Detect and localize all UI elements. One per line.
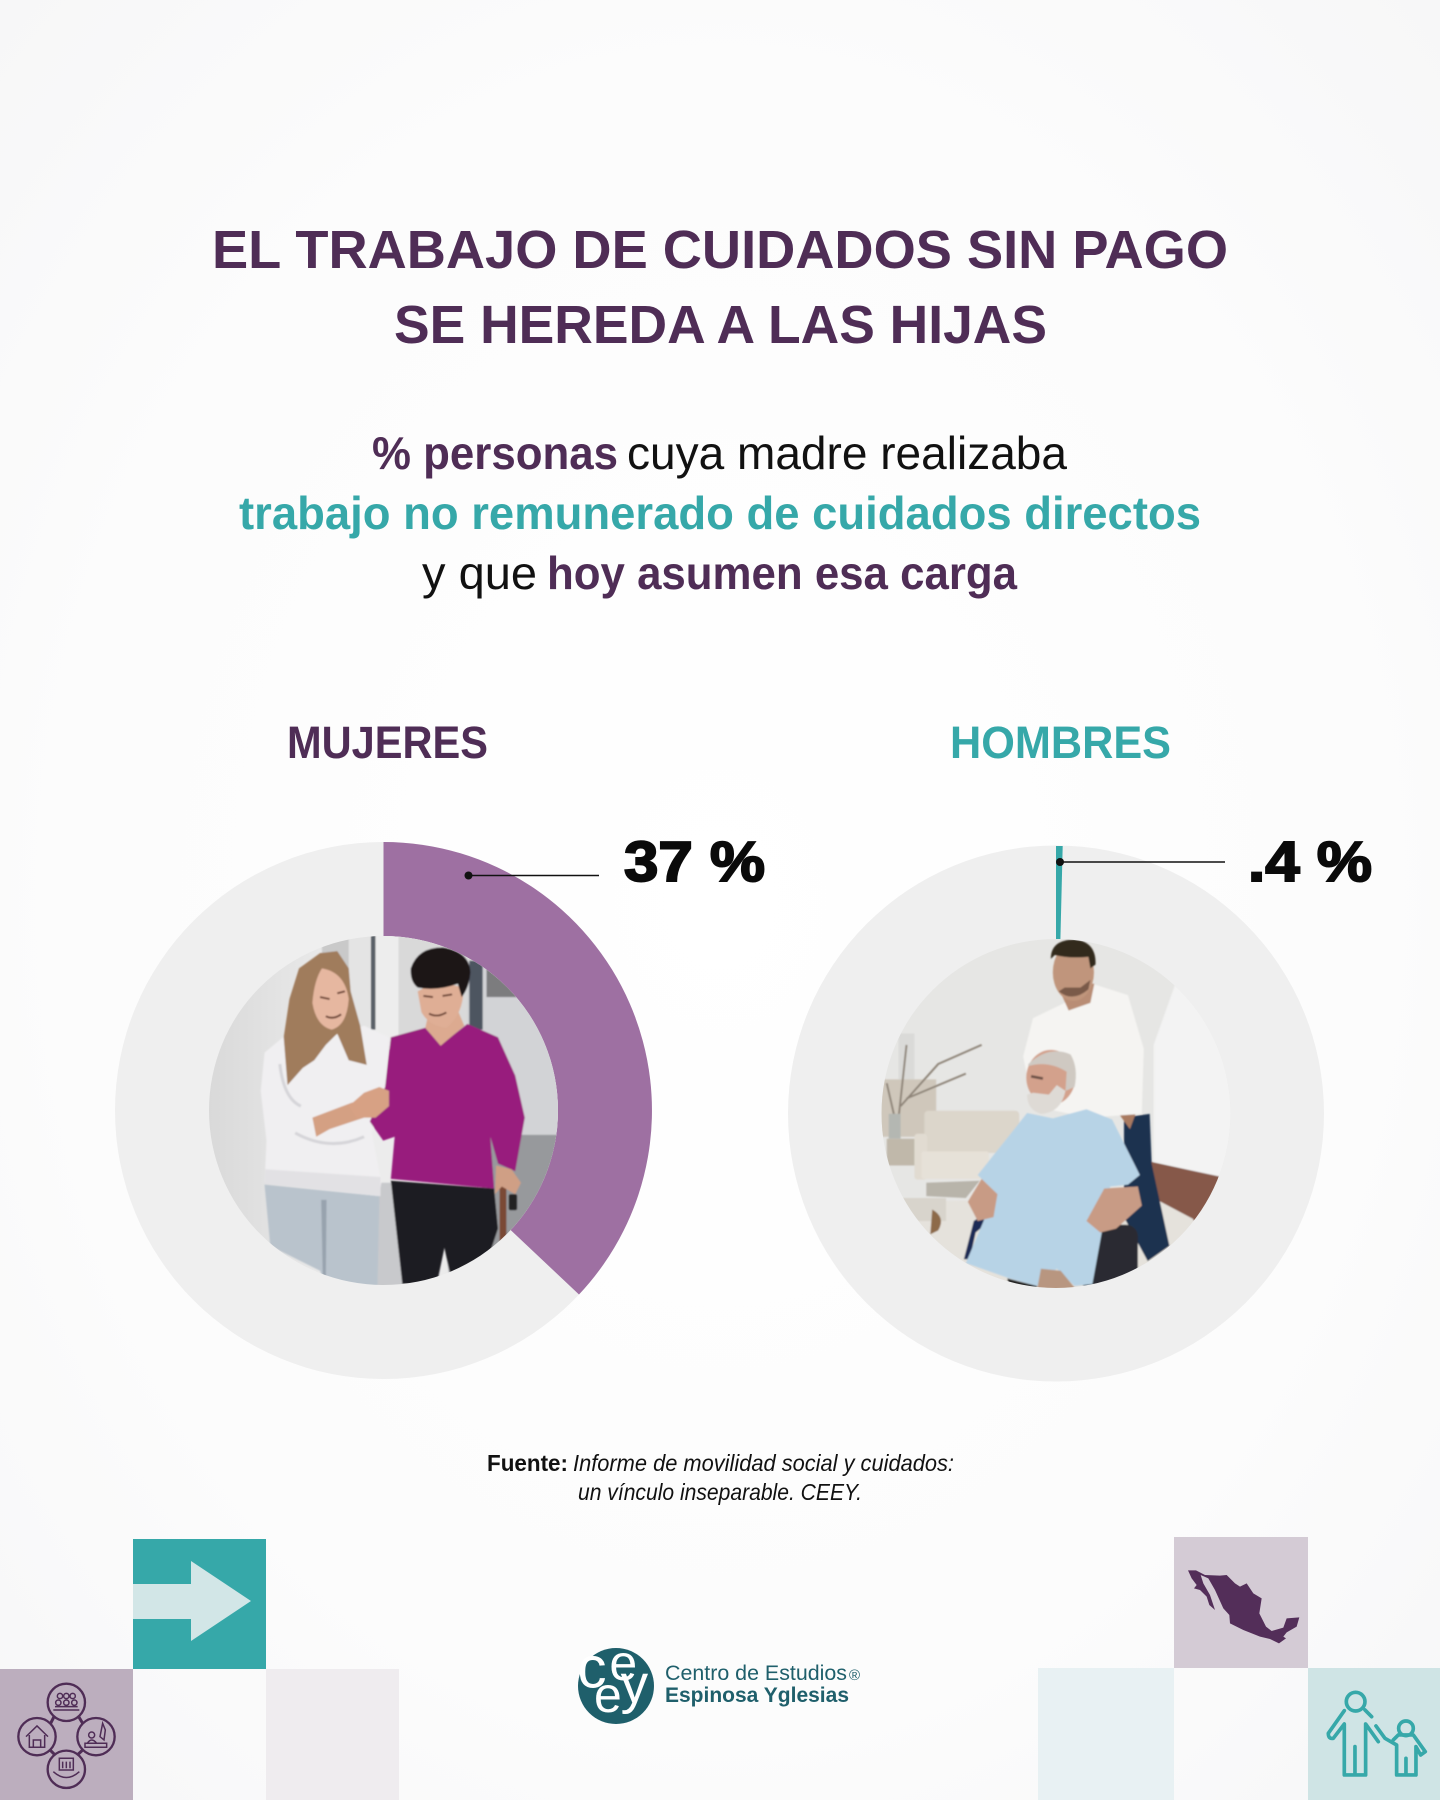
- leader line: 0.4%: [1056, 858, 1225, 866]
- tile: parent and child icon: [1308, 1668, 1440, 1800]
- title: [212, 220, 1228, 355]
- subtitle: trabajo no remunerado de cuidados directos: [239, 487, 1201, 539]
- source note: Fuente:: [487, 1450, 568, 1476]
- title: EL TRABAJO DE CUIDADOS SIN PAGO: [212, 220, 1228, 280]
- subtitle: y que: [422, 547, 537, 599]
- heading: mujeres: MUJERES: [287, 717, 488, 768]
- logo: CEEY: c: [577, 1635, 606, 1700]
- tile: pale purple: [266, 1669, 399, 1800]
- right woman: [391, 1181, 498, 1284]
- donut chart: mujeres 37%: [115, 842, 652, 1379]
- tile: pale teal: [1038, 1668, 1174, 1800]
- logo: CEEY: [577, 1635, 860, 1724]
- subtitle: hoy asumen esa carga: [547, 547, 1017, 599]
- value: 0.4%: .4 %: [1248, 830, 1372, 894]
- heading: hombres: HOMBRES: [950, 717, 1171, 768]
- subtitle: % personas: [372, 427, 618, 479]
- donut chart: hombres 0.4%: [788, 846, 1324, 1382]
- tile: teal arrow: [133, 1539, 266, 1669]
- title: SE HEREDA A LAS HIJAS: [394, 295, 1047, 355]
- old man: [1026, 1050, 1075, 1105]
- subtitle: cuya madre realizaba: [627, 427, 1067, 479]
- logo: CEEY: Espinosa Yglesias: [665, 1684, 849, 1707]
- tile: map of Mexico: [1174, 1537, 1308, 1668]
- value: 37%: 37 %: [624, 830, 765, 894]
- logo: CEEY: e: [609, 1635, 637, 1691]
- source note: [487, 1450, 954, 1505]
- source note: Informe de movilidad social y cuidados:: [573, 1450, 954, 1476]
- photo: hija y madre caminando: [208, 934, 559, 1286]
- logo: CEEY: ®: [849, 1667, 860, 1684]
- logo: CEEY: Centro de Estudios: [665, 1662, 847, 1685]
- leader line: 37%: [464, 872, 599, 880]
- photo: hombre empujando silla de ruedas: [879, 938, 1235, 1294]
- logo: CEEY: e: [594, 1667, 622, 1723]
- wheelchair: [1081, 1225, 1138, 1290]
- logo: CEEY: y: [621, 1653, 649, 1715]
- source note: un vínculo inseparable. CEEY.: [578, 1479, 862, 1505]
- tile: network icon: [0, 1669, 133, 1800]
- left woman: [265, 1185, 379, 1286]
- subtitle: [239, 427, 1201, 599]
- young man: [1124, 1114, 1169, 1261]
